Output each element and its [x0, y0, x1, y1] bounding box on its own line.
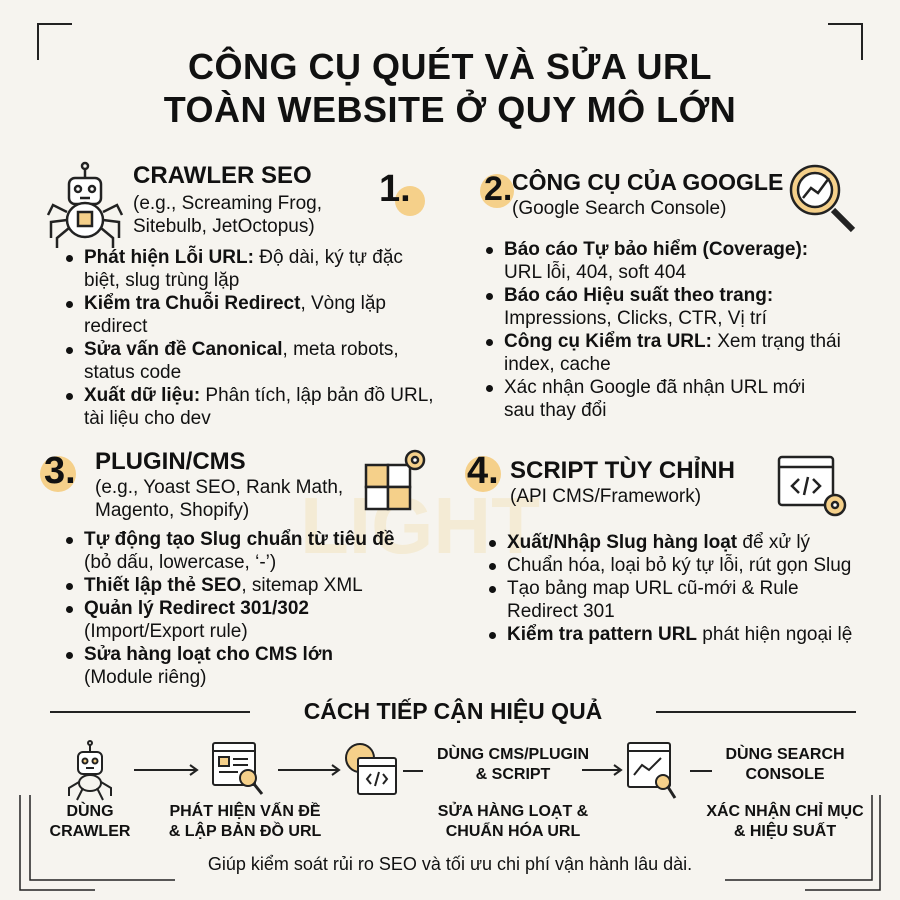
icon: puzzle gear	[364, 450, 426, 510]
panel: script: (API CMS/Framework)	[510, 486, 701, 507]
number 1: 1.	[379, 168, 411, 210]
flow diagram: & SCRIPT	[476, 766, 550, 783]
arrow	[582, 764, 623, 776]
panel: plugin cms: (e.g., Yoast SEO, Rank Math,	[95, 477, 343, 498]
section heading: cach tiep can: CÁCH TIẾP CẬN HIỆU QUẢ	[304, 698, 602, 724]
bullets: tài liệu cho dev	[84, 408, 211, 429]
icon: code window gear	[778, 456, 846, 516]
arrow	[278, 764, 341, 776]
panel: google: Báo cáo Tự bảo hiểm (Coverage):	[504, 239, 808, 260]
flow diagram: DÙNG SEARCH	[725, 746, 845, 763]
panel: crawler seo	[46, 162, 434, 429]
number 3: 3.	[44, 450, 76, 492]
flow labels: CRAWLER	[50, 823, 130, 840]
number 4: 4.	[467, 450, 499, 492]
panel: plugin cms	[40, 448, 426, 688]
panel: google: sau thay đổi	[504, 400, 606, 421]
panel: plugin cms: Magento, Shopify)	[95, 500, 249, 521]
bullets: status code	[84, 362, 181, 383]
panel: script: Chuẩn hóa, loại bỏ ký tự lỗi, rút gọn Slug	[507, 555, 851, 576]
title: CÔNG CỤ QUÉT VÀ SỬA URL	[188, 46, 712, 87]
bullets: Kiểm tra Chuỗi Redirect, Vòng lặp	[84, 293, 386, 314]
flow diagram	[50, 740, 864, 840]
panel: crawler seo: Sitebulb, JetOctopus)	[133, 216, 315, 237]
panel: google: Xác nhận Google đã nhận URL mới	[504, 377, 805, 398]
watermark: LIGHT	[300, 481, 540, 570]
bullets: Xuất dữ liệu: Phân tích, lập bản đồ URL,	[84, 385, 434, 406]
icon: chart magnifier	[627, 742, 676, 799]
flow labels: DÙNG	[66, 803, 114, 820]
icon: gear code	[345, 743, 397, 795]
panel: script: Xuất/Nhập Slug hàng loạt để xử lý	[507, 532, 810, 553]
panel: crawler seo: (e.g., Screaming Frog,	[133, 193, 322, 214]
flow diagram: DÙNG CMS/PLUGIN	[437, 746, 589, 763]
panel: google: index, cache	[504, 354, 611, 375]
title	[164, 46, 736, 130]
bullets: redirect	[84, 316, 147, 337]
flow diagram: & HIỆU SUẤT	[734, 823, 836, 840]
panel: script: Redirect 301	[507, 601, 615, 622]
panel: script: Kiểm tra pattern URL phát hiện ngoại lệ	[507, 624, 852, 645]
number 1	[379, 168, 425, 216]
icon: robot	[68, 740, 112, 800]
panel: script: SCRIPT TÙY CHỈNH	[510, 457, 735, 484]
flow labels	[50, 802, 130, 840]
panel: google: (Google Search Console)	[512, 198, 726, 219]
number 2: 2.	[484, 170, 512, 208]
panel: plugin cms: (bỏ dấu, lowercase, ‘-’)	[84, 552, 276, 573]
flow diagram: XÁC NHẬN CHỈ MỤC	[706, 803, 864, 820]
panel: plugin cms: (Import/Export rule)	[84, 621, 248, 642]
panel: plugin cms: PLUGIN/CMS	[95, 448, 246, 475]
flow diagram: SỬA HÀNG LOẠT &	[438, 803, 588, 820]
panel: google: Công cụ Kiểm tra URL: Xem trạng thái	[504, 331, 841, 352]
bullets: biệt, slug trùng lặp	[84, 270, 239, 291]
panel: crawler seo: CRAWLER SEO	[133, 162, 312, 189]
bullets	[66, 246, 434, 429]
panel: script	[465, 450, 852, 645]
panel: google: Báo cáo Hiệu suất theo trang:	[504, 285, 773, 306]
bullets: Phát hiện Lỗi URL: Độ dài, ký tự đặc	[84, 247, 403, 268]
flow diagram: CHUẨN HÓA URL	[446, 823, 580, 840]
flow diagram: CONSOLE	[745, 766, 825, 783]
flow diagram: & LẬP BẢN ĐỒ URL	[169, 823, 321, 840]
panel: plugin cms: Thiết lập thẻ SEO, sitemap XML	[84, 575, 363, 596]
panel: plugin cms: Quản lý Redirect 301/302	[84, 598, 309, 619]
panel: google: Impressions, Clicks, CTR, Vị trí	[504, 308, 767, 329]
arrow	[134, 764, 199, 776]
title: TOÀN WEBSITE Ở QUY MÔ LỚN	[164, 89, 736, 130]
flow diagram: PHÁT HIỆN VẤN ĐỀ	[169, 803, 321, 820]
panel: plugin cms: (Module riêng)	[84, 667, 206, 688]
panel: plugin cms: Tự động tạo Slug chuẩn từ tiêu đề	[84, 529, 394, 550]
panel: google: CÔNG CỤ CỦA GOOGLE	[512, 169, 783, 195]
panel: google: URL lỗi, 404, soft 404	[504, 262, 686, 283]
icon: spider robot	[46, 162, 124, 248]
bullets: Sửa vấn đề Canonical, meta robots,	[84, 339, 399, 360]
icon: document magnifier	[212, 742, 264, 795]
icon: magnifier chart	[790, 164, 856, 232]
footer text: Giúp kiểm soát rủi ro SEO và tối ưu chi phí vận hành lâu dài.	[208, 854, 692, 874]
panel: script: Tạo bảng map URL cũ-mới & Rule	[507, 578, 799, 599]
panel: plugin cms: Sửa hàng loạt cho CMS lớn	[84, 644, 333, 665]
panel: google	[480, 164, 856, 421]
